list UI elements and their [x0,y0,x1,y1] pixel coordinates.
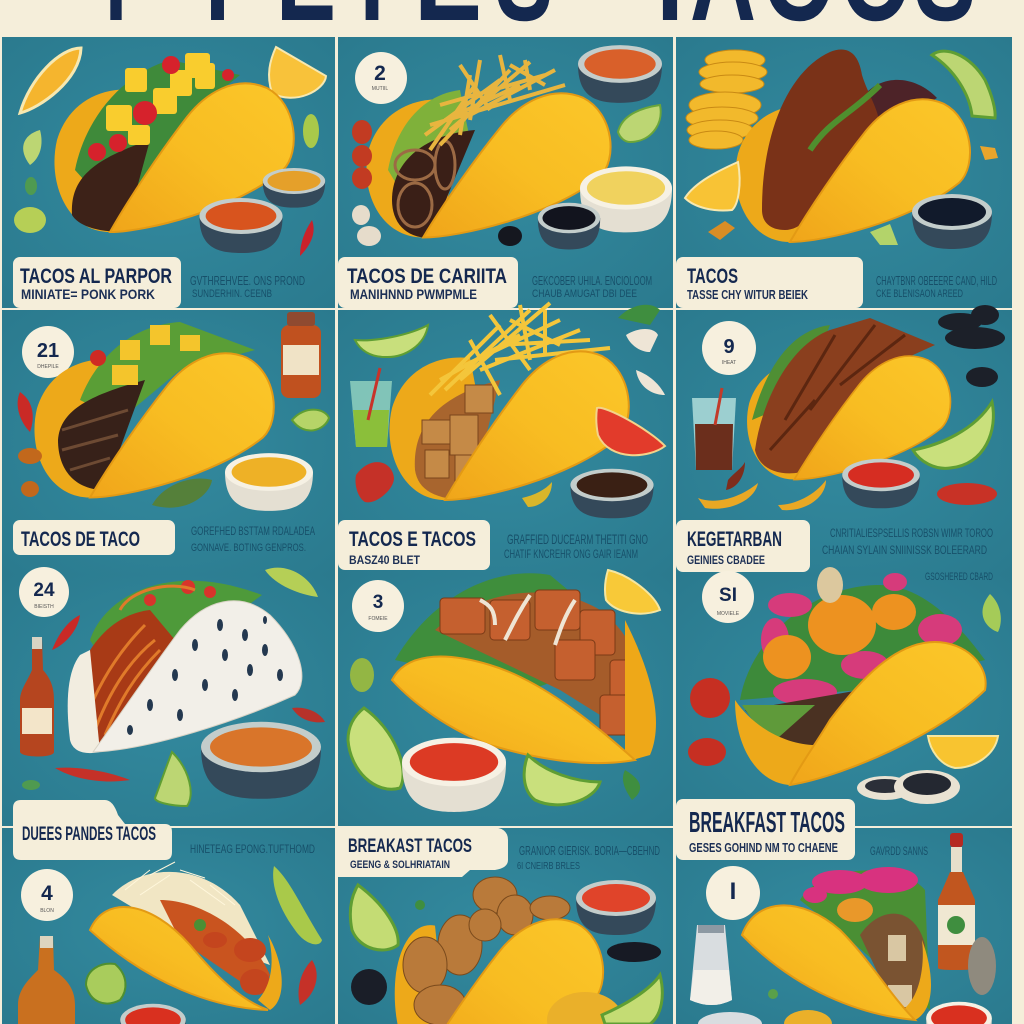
icon: blackberries [938,305,1005,387]
number badge 4: BLON [40,908,54,914]
icon: yellow pepper [522,482,552,507]
taco back shell [735,700,815,785]
icon: lemon wedge [685,162,740,210]
number badge 3 [352,580,404,632]
panel: tacos beef [676,37,1012,308]
icon: lemon wedge right [269,47,326,98]
icon: black beans [498,226,522,246]
icon: lemon wedge left [20,48,81,113]
icon: green pepper strip [265,568,318,597]
salsa bowl [926,1002,992,1024]
label: kegetarban: KEGETARBAN [687,528,782,551]
number badge SI: MOVIELE [717,611,740,617]
icon: small orange bits [18,448,42,497]
description: CHATIF KNCREHR ONG GAIR IEANM [504,547,638,561]
taco: vegetarian [735,567,986,785]
description [504,531,648,561]
small sauce bowl [263,168,325,208]
taco: fried steak [747,318,950,480]
sauce bowl orange [578,45,662,103]
taco: cheese [90,862,282,1010]
description: 6I CNEIRB BRLES [517,861,580,872]
description: GONNAVE. BOTING GENPROS. [191,542,306,554]
number badge 3: FOMEIE [368,616,388,622]
label: tacos de cariita [338,257,518,308]
icon: salt shaker [690,925,732,1005]
icon: hot sauce bottle [938,833,975,970]
icon: hot sauce bottle [20,637,54,756]
icon: chili [52,615,80,650]
icon: small tomato [688,738,726,766]
taco: open wide [392,573,656,763]
label: tacos e tacos: BASZ40 BLET [349,553,421,567]
taco: fried chicken [395,877,603,1024]
icon: red chili [55,768,130,782]
label: tacos al parpor: MINIATE= PONK PORK [21,286,155,302]
description [532,273,652,300]
icon: small garnishes [708,146,998,245]
icon: tomato [690,678,730,718]
vertical panel dividers [335,37,676,1024]
taco: beef [735,50,970,242]
taco: pink breakfast [742,867,931,1020]
orange sauce bowl [201,722,321,799]
description [190,273,305,300]
description [191,524,315,554]
number badge 4 [21,869,73,921]
icon: lime wedge [348,708,403,789]
icon: black beans left [351,969,387,1005]
description: HINETEAG EPONG.TUFTHOMD [190,842,315,856]
rice bowl [580,166,672,232]
taco: al pastor [54,53,294,232]
number badge 24: 24 [33,580,55,601]
number badge 2: 2 [374,62,386,85]
number badge 21 [22,326,74,378]
panel: tacos de cariita [338,37,673,308]
label: breakfast tacos: GESES GOHIND NM TO CHAENE [689,840,838,855]
label: duees pandes tacos: DUEES PANDES TACOS [22,824,156,845]
taco filling [752,318,935,473]
icon: glass of green drink [350,368,392,447]
icon: herb [623,770,640,800]
panel: kegetarban [676,305,1012,575]
title [92,0,976,48]
icon: lime wedge [602,975,662,1024]
panel: soft taco [2,567,335,826]
number badge 24: BIEISTH [34,604,54,610]
salsa bowl [402,738,506,812]
number badge 21: DHEPILE [37,364,59,370]
icon: bottom bowls [698,989,832,1024]
taco filling [800,867,930,1010]
icon: lime wedge [618,105,661,142]
icon: herb garnish [350,658,374,692]
salsa bowl [576,880,656,935]
taco: carnitas [366,55,611,238]
icon: lime wedge [155,752,191,806]
red sauce bowl [842,459,920,508]
number badge 21: 21 [37,340,59,362]
description: GEKCOBER UHILA. ENCIOLOOM [532,273,652,288]
taco filling [395,573,656,762]
icon: herbs [618,305,660,325]
description [876,273,997,300]
icon: red chili [300,220,314,256]
icon: lime wedge [982,594,1001,632]
icon: tortilla round [547,992,623,1024]
icon: herb [22,780,40,790]
label: tacos al parpor: TACOS AL PARPOR [20,265,172,288]
taco filling [403,877,570,1024]
taco back shell [258,935,282,1010]
label: tacos al parpor [13,257,181,308]
label: tacos de cariita: TACOS DE CARIITA [347,265,507,288]
label: breakast tacos: GEENG & SOLHRIATAIN [350,859,450,871]
icon: tomato wedge [596,408,665,455]
icon: yellow peppers [698,480,826,510]
label: tacos: TASSE CHY WITUR BEIEK [687,287,808,302]
label: breakast tacos [338,827,508,877]
panel: tacos de taco [2,310,335,575]
icon: tomato slices [352,120,372,189]
icon: chili [18,392,33,432]
icon: tortilla chips stack [686,50,767,149]
taco filling [72,53,240,232]
number badge 2: MUTIIL [372,86,388,92]
description [822,526,993,557]
taco filling [112,862,270,995]
taco front shell [790,642,986,785]
label: breakfast tacos [676,799,855,860]
icon: glass of cola [692,388,736,470]
label: tacos de taco: TACOS DE TACO [21,528,140,551]
number badge 4: 4 [41,882,53,905]
panel: breakast tacos [338,827,673,1024]
description: SUNDERHIN. CEENB [192,288,272,300]
icon: green garnishes [14,114,319,233]
description: CHAUB AMUGAT DBI DEE [532,288,637,300]
icon: lemon wedge [605,570,660,614]
description: GOREFHED BSTTAM RDALADEA [191,524,315,538]
number badge 9: 9 [723,336,735,358]
number badge 9 [702,321,756,375]
icon: avocado [152,478,212,508]
panel: grilled chicken [338,570,673,826]
label: tacos e tacos: TACOS E TACOS [349,528,476,551]
label: tacos de cariita: MANIHNND PWMPMLE [350,286,477,302]
icon: lime wedge [524,755,600,805]
dipping bowl [225,453,313,511]
label: kegetarban: GEINIES CBADEE [687,553,765,567]
icon: green pepper [273,866,322,944]
icon: cookies [857,770,960,804]
shell speckles [127,616,283,735]
label: kegetarban [676,520,810,572]
salsa bowl [120,1004,186,1024]
taco filling [58,322,255,490]
label: duees pandes tacos [13,800,172,860]
taco: grilled meat [34,322,274,498]
icon: lime wedge [932,51,995,118]
label: breakfast tacos: BREAKFAST TACOS [689,807,845,839]
icon: strawberry [355,462,394,502]
number badge 2 [355,52,407,104]
icon: garlic [352,205,381,246]
label: tacos e tacos [338,520,490,570]
taco filling [415,303,610,500]
taco front shell [742,905,915,1020]
black bean bowl [538,203,600,249]
icon: lime wedge [86,964,125,1004]
number badge 1: I [730,878,736,905]
icon: lime wedge [913,402,993,468]
label: tacos: TACOS [687,265,738,288]
icon: orange drink bottle [18,936,75,1024]
icon: hot sauce bottle [281,312,321,398]
description: CKE BLENISAON AREED [876,288,963,300]
label: tacos [676,257,863,308]
icon: lime wedge [355,325,428,357]
icon: round cracker [968,937,996,995]
description: GRANIOR GIERISK. BORIA—CBEHND [519,843,660,858]
icon: lime slice [23,130,42,165]
sauce bowl [199,198,283,253]
taco front shell [90,907,268,1010]
panel: tacos e tacos [338,303,673,575]
label: tacos de taco [13,520,175,555]
taco filling [740,567,985,775]
number badge 3: 3 [373,592,383,613]
panel: breakfast tacos [676,799,1012,1024]
icon: lime wedge [350,885,398,950]
icon: garlic cloves [626,329,665,395]
number badge 1 [706,866,760,920]
taco back shell [905,940,931,1020]
panel: flower taco [676,567,1012,826]
icon: small chili [292,708,325,722]
label: breakast tacos: BREAKAST TACOS [348,836,472,857]
description: GVTHREHVEE. ONS PROND [190,273,305,288]
taco filling [388,55,565,238]
number badge SI: SI [719,585,737,606]
description: GAVRDD SANNS [870,844,928,858]
icon: tomato slice [937,483,997,505]
panel: tacos al parpor [2,37,335,308]
icon: black beans [607,942,661,962]
soft shell [68,650,100,753]
taco filling [70,580,262,745]
number badge SI [702,571,754,623]
icon: red chili [298,960,317,1005]
panel: duees pandes tacos [2,800,335,1024]
icon: lime slice [292,410,329,431]
description: GRAFFIED DUCEARM THETITI GNO [507,531,648,547]
taco: soft white [68,580,302,753]
icon: chili [726,462,745,490]
taco: carnitas shredded [389,303,629,500]
black sauce bowl [912,194,992,249]
taco filling [762,50,937,230]
description [517,843,660,872]
number badge 9: IHEAT [722,360,736,366]
icon: lemon wedge [928,736,998,768]
dark sauce bowl [570,469,654,518]
number badge 24 [19,567,69,617]
